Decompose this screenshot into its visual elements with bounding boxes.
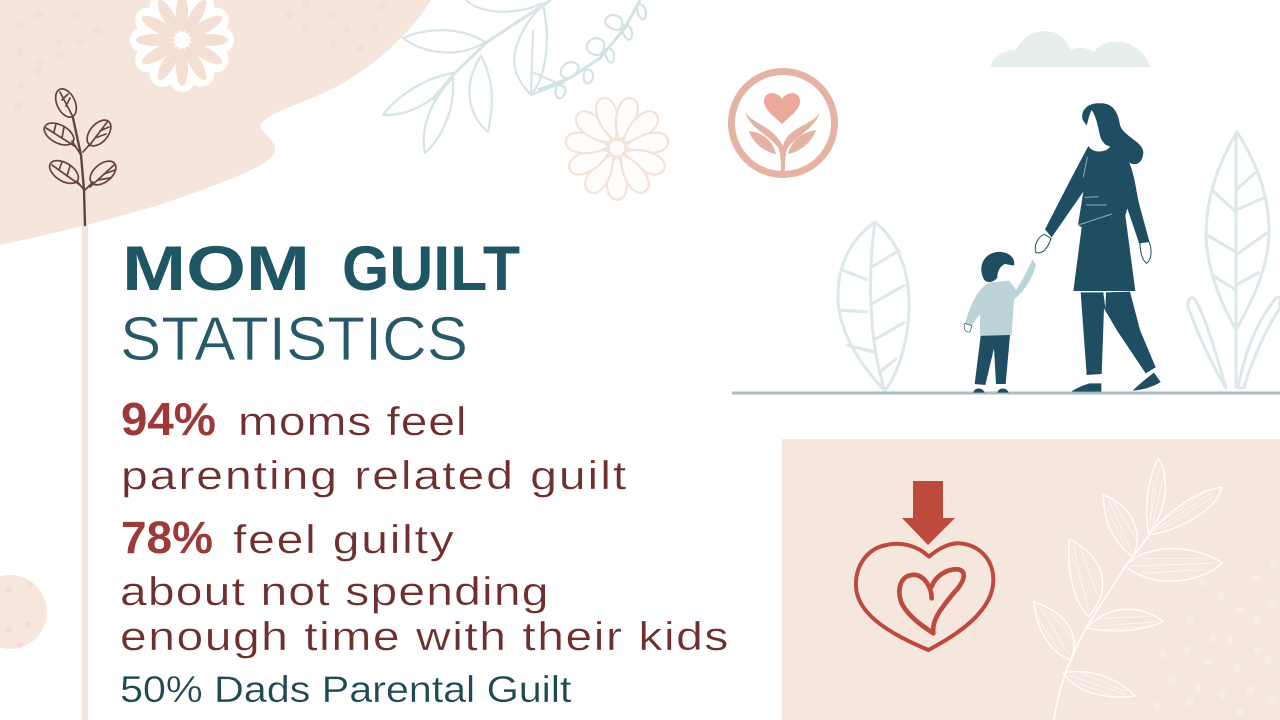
icon: right large leaf plant <box>1188 132 1280 388</box>
stat: 50 percent dads: 50% Dads Parental Guilt <box>120 669 571 710</box>
stat: 94 percent moms: parenting related guilt <box>121 454 626 498</box>
stat: 78 percent feel guilty: enough time with their kids <box>120 615 728 659</box>
stat: 94 percent moms <box>121 393 626 498</box>
child shoes <box>973 389 1009 393</box>
child hair <box>981 252 1014 282</box>
heading: MOM GUILT <box>122 234 520 304</box>
panel dots <box>1153 561 1277 716</box>
child sweater <box>965 259 1036 335</box>
mother face <box>1086 110 1107 148</box>
stat: 78 percent feel guilty: feel guilty <box>233 518 454 562</box>
icon: white flower on blob <box>130 0 234 92</box>
stat: 94 percent moms: 94% <box>121 393 216 445</box>
icon: outlined daisy <box>564 96 670 200</box>
mother shoes <box>1071 373 1161 392</box>
stat: 78 percent feel guilty: about not spending <box>120 570 548 614</box>
mother dress <box>1045 146 1149 291</box>
mother dress detail lines <box>1078 157 1112 225</box>
ground line <box>732 392 1280 394</box>
icon: heart and leaves badge <box>732 72 834 174</box>
heading: MOM GUILT: MOM <box>122 234 310 304</box>
mother legs <box>1081 292 1156 375</box>
decorative peach circle <box>0 575 47 649</box>
child hand <box>964 323 972 332</box>
heading: STATISTICS: STATISTICS <box>120 305 468 374</box>
icon: down arrow <box>902 481 955 545</box>
heading: MOM GUILT: GUILT <box>342 234 520 304</box>
icon: double heart <box>856 543 993 650</box>
stat: 78 percent feel guilty: 78% <box>121 512 213 563</box>
icon: cloud <box>991 31 1150 67</box>
icon: pale teal small sprig <box>538 0 646 98</box>
mother hair <box>1082 103 1143 164</box>
mother hands <box>1035 234 1151 263</box>
peach background blob <box>0 0 431 245</box>
stat: 94 percent moms: moms feel <box>238 400 467 444</box>
panel: peach lower right <box>782 439 1280 720</box>
illustration: mother <box>1035 103 1161 392</box>
child pants <box>975 335 1010 385</box>
vertical peach line <box>82 225 88 720</box>
illustration: child <box>964 252 1036 393</box>
icon: white leaf branch <box>1034 458 1223 720</box>
stat: 78 percent feel guilty <box>120 512 728 659</box>
icon: pale teal foliage branch <box>383 0 565 153</box>
icon: brown sprig <box>41 86 120 225</box>
icon: left large leaf <box>838 222 909 391</box>
